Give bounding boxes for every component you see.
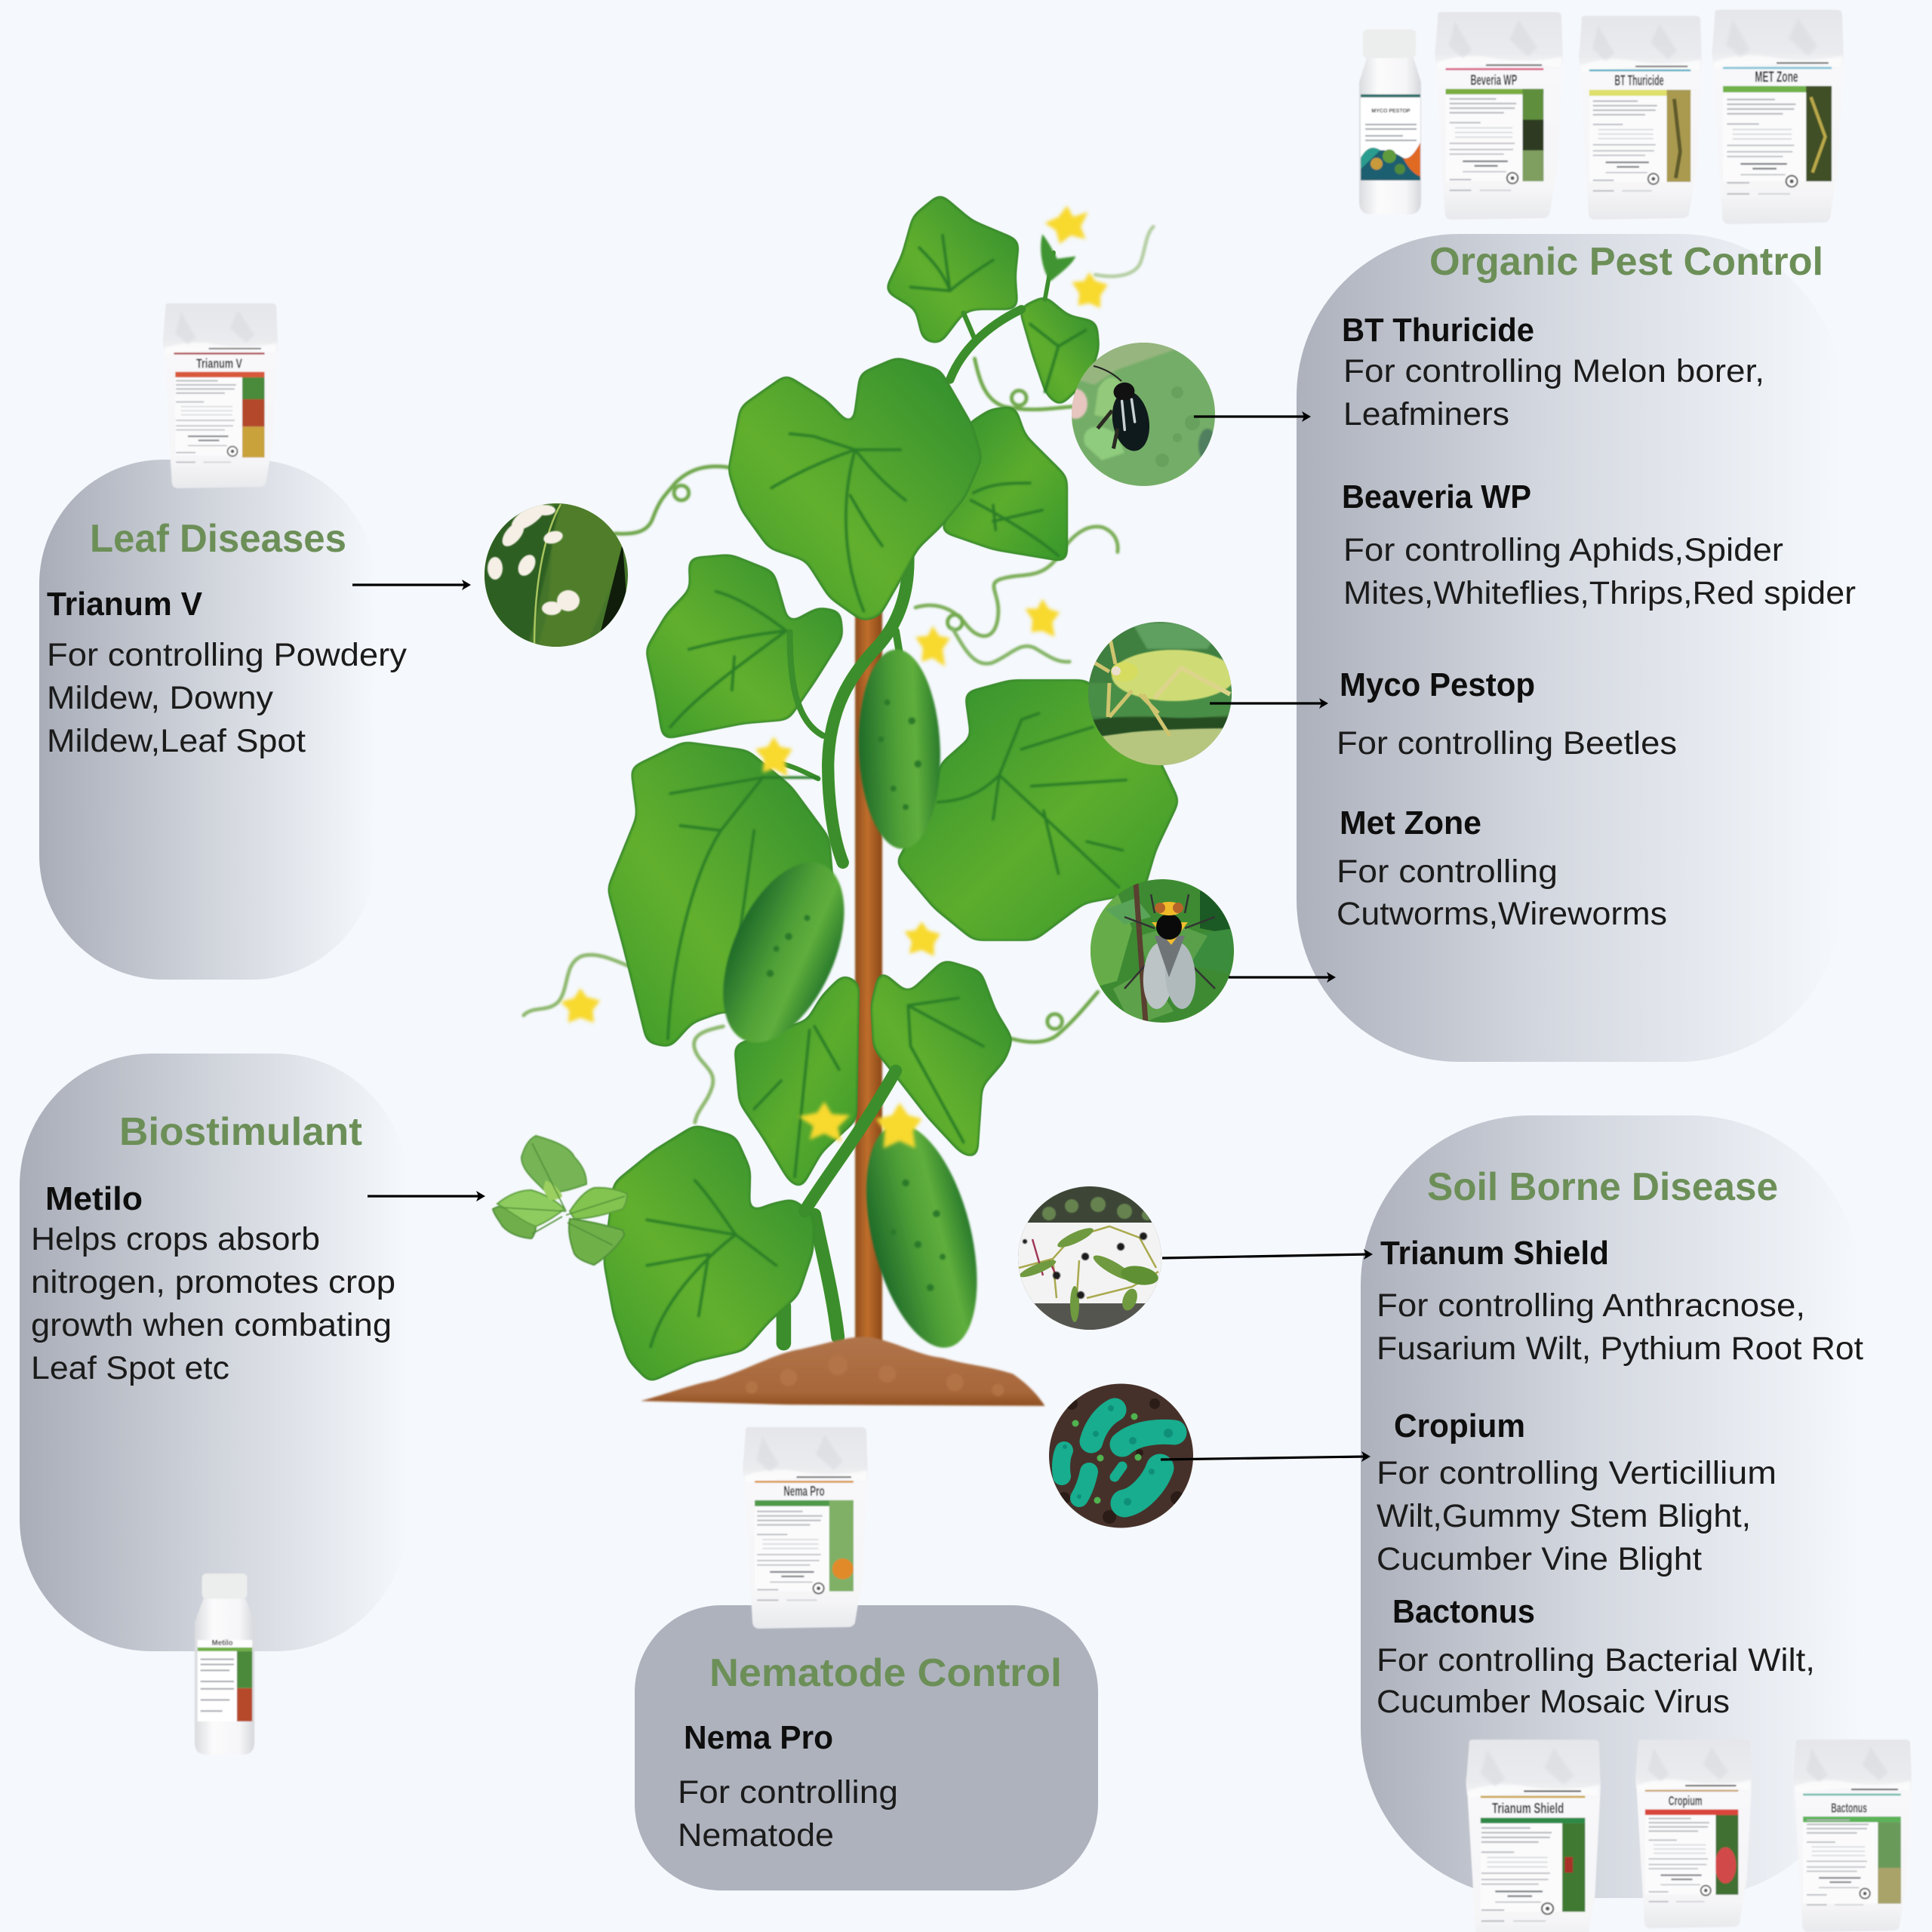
entry: Trianum Shield bbox=[1377, 1235, 1863, 1367]
product name: Nema Pro: Nema Pro bbox=[684, 1719, 833, 1756]
entry: Myco Pestop bbox=[1337, 666, 1677, 761]
heading: biostimulant: Biostimulant bbox=[119, 1110, 362, 1154]
description: Nema Pro: Nematode bbox=[678, 1817, 834, 1854]
product: Bactonus pouch bbox=[1793, 1740, 1912, 1932]
entry: Trianum Shield: Trianum Shield bbox=[1380, 1235, 1609, 1272]
description: Metilo: growth when combating bbox=[31, 1307, 392, 1343]
lower vine bbox=[804, 1071, 896, 1211]
entry: Met Zone: Cutworms,Wireworms bbox=[1337, 896, 1667, 932]
leaf: right behind centre bbox=[940, 407, 1067, 562]
entry: Cropium bbox=[1377, 1407, 1777, 1577]
product: Metilo bottle bbox=[195, 1574, 254, 1755]
heading: soil borne disease: Soil Borne Disease bbox=[1427, 1165, 1778, 1209]
tendrils bbox=[524, 226, 1153, 1122]
leaf: lower right bbox=[871, 960, 1013, 1158]
entry: Bactonus bbox=[1377, 1593, 1815, 1720]
arrow: bacteria to soil borne disease bbox=[1161, 1451, 1371, 1462]
leaf: large central bbox=[728, 357, 982, 621]
photo: wilted seedlings bbox=[1017, 1185, 1164, 1332]
description: Metilo: Leaf Spot etc bbox=[31, 1350, 229, 1386]
entry: BT Thuricide: BT Thuricide bbox=[1342, 312, 1534, 349]
flowers bbox=[561, 206, 1108, 1149]
entry: Met Zone: For controlling bbox=[1337, 854, 1558, 890]
entry: Bactonus: Cucumber Mosaic Virus bbox=[1377, 1684, 1730, 1720]
photo: fly on leaves bbox=[1089, 878, 1238, 1026]
entry: Bactonus: Bactonus bbox=[1392, 1593, 1535, 1630]
description: Trianum V: Mildew,Leaf Spot bbox=[47, 723, 306, 759]
small leaves by top flowers bbox=[1041, 234, 1075, 281]
leaf: right large bbox=[896, 680, 1179, 940]
product: Trianum Shield pouch: Trianum Shield bbox=[1492, 1801, 1564, 1817]
description: Metilo: nitrogen, promotes crop bbox=[31, 1264, 395, 1300]
product: Trianum V pouch bbox=[163, 303, 278, 489]
description: Metilo: Helps crops absorb bbox=[31, 1221, 320, 1257]
cucumber: middle bbox=[698, 844, 869, 1061]
panel: nematode control bbox=[635, 1605, 1098, 1890]
product: Nema Pro pouch bbox=[743, 1427, 868, 1629]
product: Myco Pestop bottle: MYCO PESTOP bbox=[1371, 109, 1411, 114]
entry: Trianum Shield: For controlling Anthracnose, bbox=[1377, 1287, 1805, 1324]
cucumber: lower bbox=[846, 1112, 997, 1359]
photo: soil bacteria bbox=[1048, 1383, 1195, 1531]
cucumber: upper bbox=[855, 648, 943, 851]
product name: Trianum V: Trianum V bbox=[47, 586, 203, 623]
leaf: left middle bbox=[646, 555, 843, 740]
product: Bactonus pouch: Bactonus bbox=[1831, 1800, 1867, 1815]
product: Trianum V pouch: Trianum V bbox=[196, 355, 242, 371]
entry: Met Zone: Met Zone bbox=[1340, 804, 1481, 841]
entry: Myco Pestop: Myco Pestop bbox=[1340, 666, 1535, 703]
description: Nema Pro bbox=[678, 1774, 898, 1854]
entry: Beaveria WP: Mites,Whiteflies,Thrips,Red spider bbox=[1343, 575, 1856, 611]
entry: BT Thuricide: Leafminers bbox=[1343, 396, 1509, 432]
entry: Trianum Shield: Fusarium Wilt, Pythium Root Rot bbox=[1377, 1331, 1863, 1367]
product: BT Thuricide pouch: BT Thuricide bbox=[1614, 73, 1664, 89]
cucumber plant illustration bbox=[524, 193, 1179, 1406]
arrow: biostimulant to mint bbox=[368, 1191, 485, 1201]
product: Nema Pro pouch: Nema Pro bbox=[783, 1484, 825, 1500]
product: Beveria WP pouch: Beveria WP bbox=[1470, 72, 1517, 89]
description: Trianum V bbox=[47, 637, 408, 759]
heading: organic pest control: Organic Pest Control bbox=[1429, 240, 1823, 284]
panel: organic pest control bbox=[1297, 234, 1856, 1062]
entry: Beaveria WP: Beaveria WP bbox=[1342, 478, 1531, 515]
upper vines bbox=[828, 253, 1054, 863]
entry: Myco Pestop: For controlling Beetles bbox=[1337, 725, 1677, 761]
arrow: leaf diseases to powdery mildew bbox=[352, 580, 471, 590]
panel: soil borne disease bbox=[1361, 1115, 1863, 1898]
product: Beveria WP pouch bbox=[1435, 12, 1562, 220]
heading: leaf diseases: Leaf Diseases bbox=[90, 517, 346, 561]
photo: flea beetle on leaf bbox=[1063, 341, 1217, 488]
product: MET Zone pouch: MET Zone bbox=[1755, 69, 1798, 86]
entry: Bactonus: For controlling Bacterial Wilt, bbox=[1377, 1642, 1815, 1678]
arrow: leafhopper to organic pest control bbox=[1210, 698, 1328, 709]
product name: Metilo: Metilo bbox=[45, 1180, 143, 1217]
entry: Beaveria WP: For controlling Aphids,Spider bbox=[1343, 532, 1783, 568]
entry: Beaveria WP bbox=[1342, 478, 1856, 611]
leaf: lower centre bbox=[734, 974, 859, 1189]
arrow: seedlings to soil borne disease bbox=[1162, 1249, 1373, 1260]
entry: Met Zone bbox=[1337, 804, 1667, 932]
description: Metilo bbox=[31, 1221, 395, 1386]
product: BT Thuricide pouch bbox=[1579, 16, 1701, 220]
leaf: top bbox=[884, 193, 1019, 344]
stake bbox=[855, 604, 882, 1349]
description: Trianum V: For controlling Powdery bbox=[47, 637, 408, 673]
entry: BT Thuricide bbox=[1342, 312, 1764, 432]
arrow: beetle to organic pest control bbox=[1194, 411, 1311, 422]
leaf: bottom bbox=[604, 1125, 814, 1383]
product: Cropium pouch: Cropium bbox=[1669, 1793, 1703, 1808]
leaf: upper small right bbox=[1019, 296, 1099, 407]
product: Trianum Shield pouch bbox=[1466, 1740, 1601, 1932]
entry: Cropium: Cucumber Vine Blight bbox=[1377, 1541, 1702, 1577]
arrow: fly to organic pest control bbox=[1229, 972, 1336, 983]
description: Trianum V: Mildew, Downy bbox=[47, 680, 274, 716]
leaf: left large bbox=[608, 742, 835, 1048]
entry: Cropium: Cropium bbox=[1394, 1407, 1525, 1444]
photo: powdery mildew on leaf bbox=[483, 499, 630, 649]
panel: leaf diseases bbox=[39, 460, 408, 980]
entry: BT Thuricide: For controlling Melon borer, bbox=[1343, 353, 1764, 389]
product: Myco Pestop bottle bbox=[1358, 29, 1422, 214]
stems bbox=[770, 632, 838, 1343]
description: Nema Pro: For controlling bbox=[678, 1774, 898, 1810]
soil mound bbox=[641, 1337, 1045, 1406]
product: MET Zone pouch bbox=[1712, 10, 1843, 224]
panel: biostimulant bbox=[20, 1054, 408, 1651]
heading: nematode control: Nematode Control bbox=[709, 1651, 1062, 1695]
photo: green leafhopper bbox=[1087, 620, 1238, 770]
leaf veins bbox=[647, 235, 1126, 1347]
product: Metilo bottle: Metilo bbox=[212, 1639, 233, 1647]
product: Cropium pouch bbox=[1635, 1740, 1752, 1928]
icon: mint sprig bbox=[493, 1136, 627, 1265]
entry: Cropium: For controlling Verticillium bbox=[1377, 1455, 1777, 1491]
cucumber stalk bbox=[896, 631, 900, 653]
entry: Cropium: Wilt,Gummy Stem Blight, bbox=[1377, 1498, 1751, 1534]
